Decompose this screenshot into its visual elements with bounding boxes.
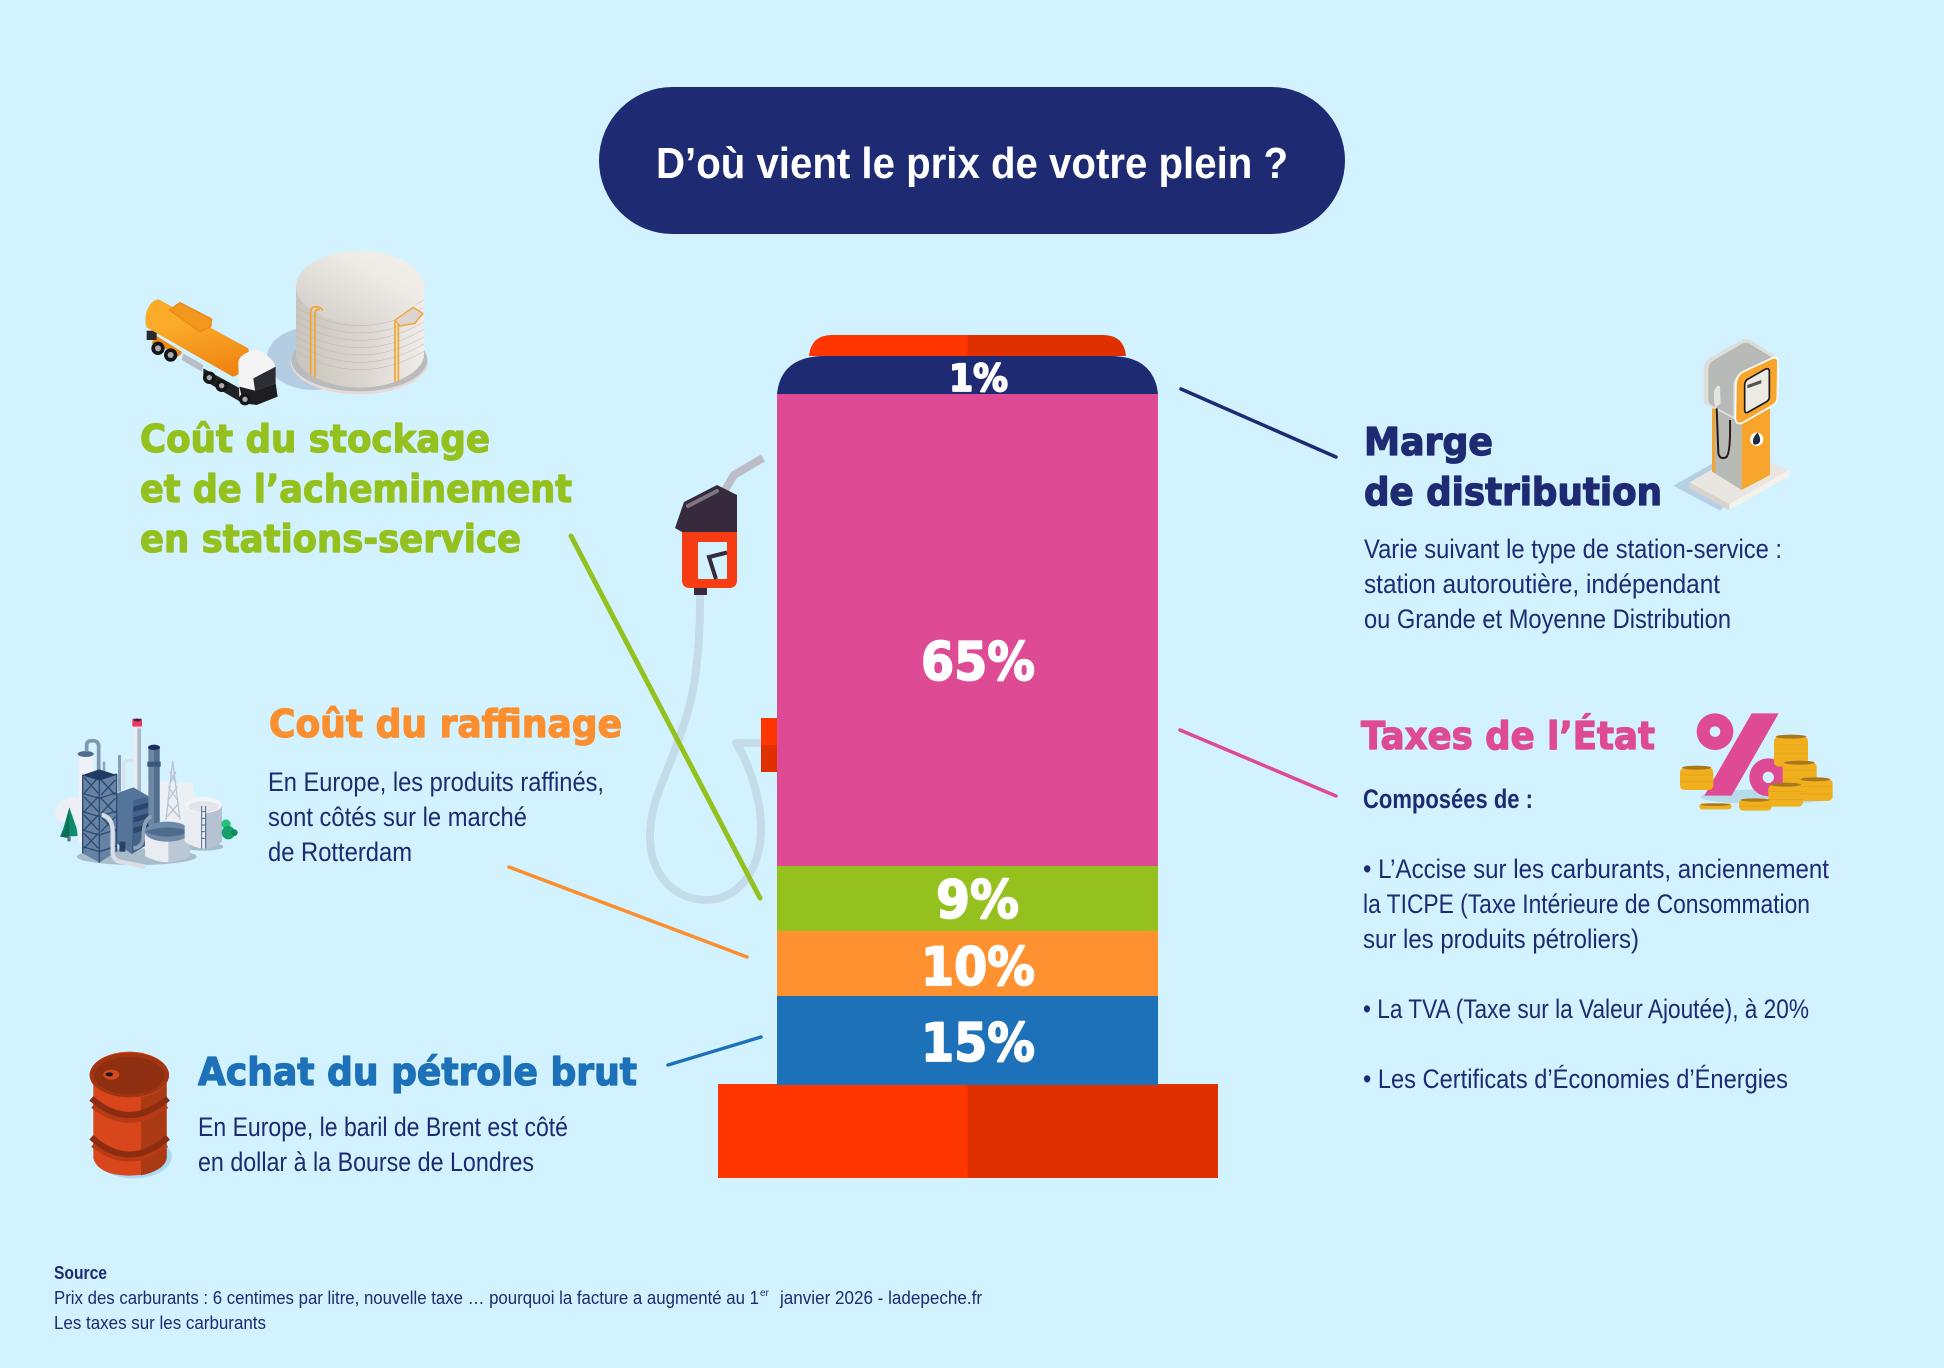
connector: stockage	[571, 536, 760, 898]
source footer: Prix des carburants : 6 centimes par litre, nouvelle taxe … pourquoi la facture a augmenté au 1	[54, 1288, 759, 1308]
text: marge description: ou Grande et Moyenne Distribution	[1364, 604, 1731, 634]
source footer: Source	[54, 1263, 107, 1283]
icon: storage tank and tanker truck	[145, 251, 428, 405]
panel: taxes de l'état	[1361, 713, 1833, 1094]
segment: stockage 9%: 9%	[936, 870, 1019, 931]
heading: marge de distribution	[1364, 420, 1662, 514]
segment: taxes 65%	[777, 394, 1158, 866]
icon: hose and fuel nozzle	[650, 458, 777, 900]
source footer: janvier 2026 - ladepeche.fr	[779, 1288, 982, 1308]
text: raffinage description: de Rotterdam	[268, 837, 412, 867]
segment: marge 1%: 1%	[949, 357, 1008, 400]
segment: raffinage 10%	[777, 931, 1158, 998]
heading: achat du pétrole brut: Achat du pétrole brut	[198, 1050, 637, 1094]
panel: marge de distribution	[1364, 339, 1789, 634]
tanker truck	[145, 299, 278, 405]
heading: coût du stockage: et de l’acheminement	[140, 467, 572, 511]
segment: brut 15%: 15%	[921, 1013, 1035, 1074]
heading: coût du stockage: Coût du stockage	[140, 417, 490, 461]
panel: raffinage	[55, 702, 622, 867]
text: marge description: station autoroutière, indépendant	[1364, 569, 1720, 599]
pump base	[718, 1084, 1218, 1178]
text: list of taxes: • L’Accise sur les carburants, anciennement	[1363, 854, 1829, 884]
text: list of taxes: • La TVA (Taxe sur la Valeur Ajoutée), à 20%	[1363, 994, 1809, 1024]
icon: refinery	[55, 719, 238, 867]
text: marge description: Varie suivant le type de station-service :	[1364, 534, 1782, 564]
connector: brut	[668, 1037, 761, 1065]
segment: taxes 65%: 65%	[921, 632, 1035, 693]
heading: coût du stockage: en stations-service	[140, 517, 521, 561]
panel: achat du pétrole brut	[90, 1050, 637, 1178]
text: marge description	[1364, 534, 1782, 634]
heading: taxes de l'état: Taxes de l’État	[1361, 714, 1655, 758]
icon: oil barrel	[90, 1052, 172, 1178]
text: list of taxes: la TICPE (Taxe Intérieure de Consommation	[1363, 889, 1810, 919]
text: brut description: En Europe, le baril de Brent est côté	[198, 1112, 568, 1142]
segment: marge 1%	[777, 356, 1158, 400]
icon: percent sign and coins	[1680, 713, 1833, 811]
pump top cap	[809, 335, 1126, 356]
connector: raffinage	[509, 867, 747, 957]
source footer: er	[760, 1288, 770, 1299]
heading: marge de distribution: de distribution	[1364, 470, 1662, 514]
text: composées de: Composées de :	[1363, 784, 1533, 814]
text: brut description	[198, 1112, 568, 1177]
segment: brut 15%	[777, 996, 1158, 1085]
source footer: Les taxes sur les carburants	[54, 1313, 266, 1333]
text: raffinage description: En Europe, les produits raffinés,	[268, 767, 604, 797]
panel: stockage	[140, 251, 572, 561]
heading: coût du stockage	[140, 417, 572, 561]
segment: raffinage 10%: 10%	[921, 937, 1035, 998]
heading: coût du raffinage: Coût du raffinage	[269, 702, 622, 746]
heading: marge de distribution: Marge	[1364, 420, 1493, 464]
text: raffinage description: sont côtés sur le marché	[268, 802, 527, 832]
text: brut description: en dollar à la Bourse de Londres	[198, 1147, 534, 1177]
icon: petrol pump	[1673, 339, 1789, 511]
title: D’où vient le prix de votre plein ?	[656, 139, 1288, 188]
title	[599, 87, 1345, 234]
text: list of taxes: • Les Certificats d’Économies d’Énergies	[1363, 1064, 1788, 1094]
source footer	[54, 1263, 982, 1333]
text: raffinage description	[268, 767, 604, 867]
connector: taxes	[1180, 730, 1336, 796]
segment: stockage 9%	[777, 866, 1158, 931]
connector: marge	[1181, 389, 1336, 457]
text: list of taxes: sur les produits pétroliers)	[1363, 924, 1639, 954]
text: list of taxes	[1363, 854, 1829, 1094]
chart: stacked fuel pump price breakdown	[718, 335, 1218, 1178]
